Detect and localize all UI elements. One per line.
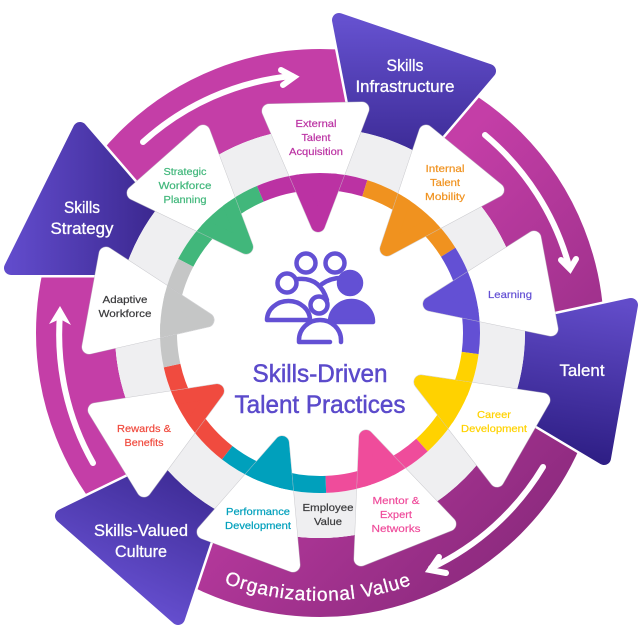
practice: External Talent Acquisition <box>269 109 362 225</box>
practice: Strategic Workforce Planning: Planning <box>164 194 207 206</box>
arrow: bottom clockwise <box>430 467 543 573</box>
practice: Strategic Workforce Planning: Workforce <box>158 180 212 192</box>
hub background disc <box>115 128 525 538</box>
practice: Mentor & Expert Networks: Mentor & <box>372 495 420 507</box>
label: Skills Infrastructure: Infrastructure <box>356 78 454 96</box>
practice: Rewards & Benefits: Rewards & <box>117 423 171 435</box>
arrow: right clockwise <box>485 135 576 269</box>
label: Skills Strategy: Strategy <box>50 220 114 238</box>
grey ring <box>138 150 502 516</box>
practice: Employee Value: Value <box>314 516 342 528</box>
outer ring: magenta cycle band <box>76 88 564 578</box>
title: Talent Practices <box>234 391 406 419</box>
label: Skills-Valued Culture: Skills-Valued <box>94 522 188 540</box>
practice: Adaptive Workforce: Workforce <box>98 308 152 320</box>
panel: Talent <box>423 305 631 458</box>
practice: External Talent Acquisition: Talent <box>302 132 331 144</box>
practice: Strategic Workforce Planning: Strategic <box>164 166 206 178</box>
practice: Adaptive Workforce <box>89 254 207 347</box>
label: Skills Strategy: Skills <box>64 199 100 217</box>
label: Skills-Valued Culture: Culture <box>115 543 167 561</box>
icon: group of people <box>267 254 373 342</box>
practice: Mentor & Expert Networks: Expert <box>380 509 412 521</box>
label: Organizational Value: Organizational Value <box>226 572 410 602</box>
practice: Strategic Workforce Planning <box>134 132 246 247</box>
practice: Rewards & Benefits <box>95 391 217 490</box>
practice: Internal Talent Mobility: Mobility <box>425 191 466 203</box>
arrow: top clockwise <box>143 70 294 142</box>
practice: Career Development: Career <box>477 409 512 421</box>
practice: Internal Talent Mobility: Internal <box>426 163 464 175</box>
practice: External Talent Acquisition: External <box>296 118 336 130</box>
label: Talent: Talent <box>560 362 605 380</box>
panel: Skills Infrastructure <box>339 20 489 205</box>
practice: External Talent Acquisition: Acquisition <box>289 146 343 158</box>
practice: Career Development <box>421 382 543 480</box>
practice: Learning <box>430 238 551 329</box>
panel: Skills Strategy <box>11 129 200 268</box>
practice: Learning: Learning <box>488 289 532 301</box>
practice: Adaptive Workforce: Adaptive <box>102 294 148 306</box>
practice: Internal Talent Mobility: Talent <box>430 177 460 189</box>
colour ring segments <box>106 119 534 547</box>
practice: Employee Value: Employee <box>302 502 354 514</box>
arrow: left clockwise <box>49 306 93 463</box>
practice: Performance Development: Development <box>225 520 291 532</box>
panel: Skills-Valued Culture <box>62 429 241 618</box>
practice: Mentor & Expert Networks <box>361 437 449 559</box>
title: Skills-Driven <box>252 360 388 388</box>
practice: Mentor & Expert Networks: Networks <box>372 523 420 535</box>
practice: Rewards & Benefits: Benefits <box>124 437 164 449</box>
practice: Performance Development <box>204 443 293 565</box>
practice: Internal Talent Mobility <box>387 132 497 249</box>
label: Skills Infrastructure: Skills <box>386 57 424 75</box>
practice: Performance Development: Performance <box>226 506 290 518</box>
practice: Career Development: Development <box>461 423 527 435</box>
